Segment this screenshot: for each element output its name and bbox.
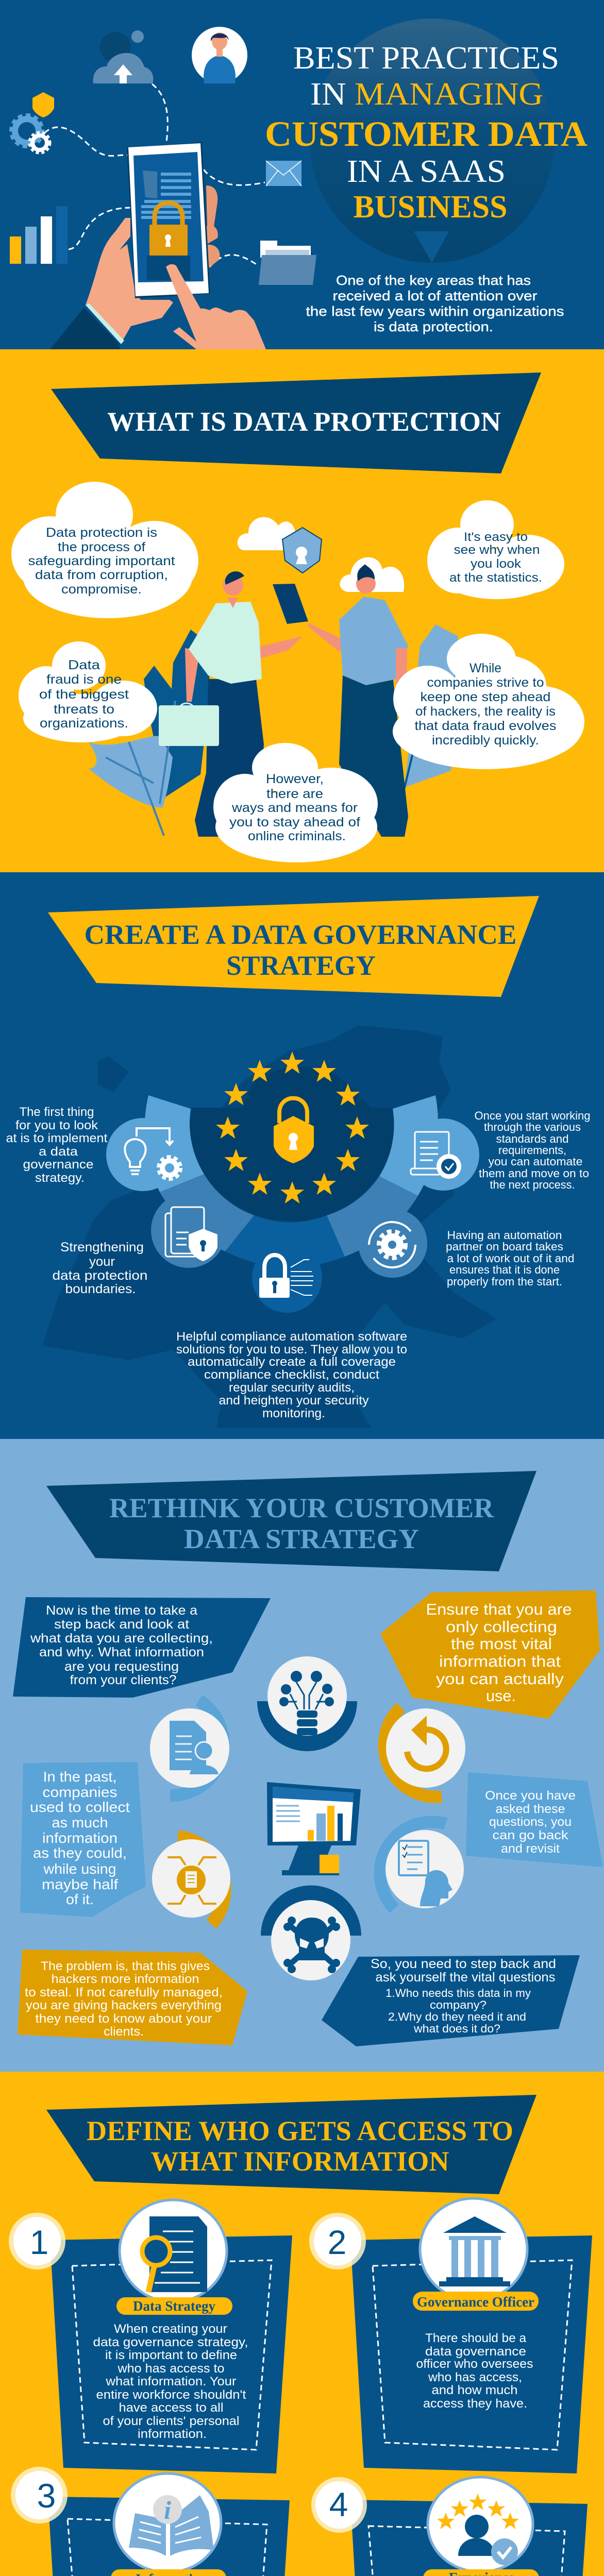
text: boundaries xyxy=(53,1240,147,1296)
callout: vital information: only collecting xyxy=(446,1618,557,1636)
text: first thing: strategy. xyxy=(35,1171,85,1185)
callout: statistics: see why when xyxy=(454,543,540,557)
ring segments xyxy=(106,1095,479,1313)
callout: vital questions xyxy=(322,1955,580,2046)
callout: vital information: the most vital xyxy=(451,1635,552,1653)
text: automate: you can automate xyxy=(489,1155,582,1168)
panel: rethink your customer data strategy xyxy=(0,1439,604,2072)
panel: hero xyxy=(0,0,604,349)
subtitle: One of the key areas that has xyxy=(336,273,531,288)
callout: vital information: use. xyxy=(486,1687,516,1705)
card text: what information. Your xyxy=(105,2375,237,2388)
callout: means xyxy=(213,743,378,862)
icon: document magnifier xyxy=(120,2200,227,2302)
card text: entire workforce shouldn't xyxy=(96,2388,246,2402)
callout: means: there are xyxy=(266,787,323,801)
title: CUSTOMER DATA xyxy=(265,114,588,154)
heading banner: DEFINE WHO GETS ACCESS TO xyxy=(87,2115,513,2146)
heading banner: WHAT INFORMATION xyxy=(150,2146,449,2177)
heading banner xyxy=(48,896,539,997)
callout: hackers: of hackers, the reality is xyxy=(415,704,556,719)
text: automate: Once you start working xyxy=(474,1109,591,1122)
callout: step back xyxy=(13,1597,271,1698)
stars xyxy=(216,1052,369,1204)
text: compliance software: compliance checklist, conduct xyxy=(204,1368,379,1382)
callout: vital information: information that xyxy=(439,1652,561,1670)
callout: in the past xyxy=(20,1762,146,1917)
card 2: governance officer xyxy=(309,2198,592,2473)
callout: in the past: as much xyxy=(52,1815,108,1831)
callout: statistics xyxy=(427,500,564,599)
number 3 xyxy=(11,2467,68,2523)
text: automation partner: partner on board takes xyxy=(446,1240,563,1253)
icon: gears xyxy=(11,115,50,153)
map island xyxy=(98,1056,129,1092)
icon: folder xyxy=(259,241,316,285)
number 4: 4 xyxy=(329,2485,348,2523)
card text: it is important to define xyxy=(105,2348,237,2362)
heading banner: DATA STRATEGY xyxy=(184,1523,419,1554)
illustration: man with briefcase xyxy=(159,571,303,837)
callout: the problem: to steal. If not carefully managed, xyxy=(25,1986,223,1999)
icon: open book xyxy=(114,2473,221,2572)
text: automation partner: properly from the start. xyxy=(447,1275,562,1288)
callout: means: However, xyxy=(266,772,324,786)
illustration: hand holding phone xyxy=(50,142,266,349)
icon: bank building xyxy=(420,2198,527,2300)
icon: data connections xyxy=(152,1837,230,1924)
callout: means: you to stay ahead of xyxy=(229,815,360,829)
callout: vital questions: company? xyxy=(430,1998,486,2011)
callout: hackers: keep one step ahead xyxy=(421,690,550,704)
icon: central lock shield xyxy=(274,1098,314,1163)
text: automation partner xyxy=(446,1229,574,1288)
text: automation partner: a lot of work out of it and xyxy=(447,1252,574,1265)
text: compliance software: regular security audits, xyxy=(229,1381,355,1395)
illustration: small clouds and shield xyxy=(238,517,404,592)
text: first thing: a data xyxy=(39,1145,78,1159)
callout: revisit: asked these xyxy=(496,1802,565,1816)
callout: vital questions: So, you need to step back and xyxy=(371,1957,556,1971)
title: IN MANAGING xyxy=(310,77,543,112)
number 4 xyxy=(311,2477,367,2533)
callout: statistics: at the statistics. xyxy=(449,571,542,585)
callout: the problem: they need to know about your xyxy=(35,2012,212,2026)
text: automation partner: ensures that it is done xyxy=(449,1263,560,1276)
illustration: plants xyxy=(89,624,458,836)
number 2: 2 xyxy=(328,2223,346,2261)
card text: data governance xyxy=(425,2345,526,2359)
card text: officer who oversees xyxy=(416,2357,533,2371)
subtitle: received a lot of attention over xyxy=(333,288,538,303)
callout: the problem xyxy=(18,1950,247,2045)
subtitle xyxy=(306,273,564,334)
callout: vital information: Ensure that you are xyxy=(426,1600,572,1618)
callout: fraud: threats to xyxy=(54,702,114,717)
callout: the problem: The problem is, that this gives xyxy=(41,1959,210,1973)
icon: shield xyxy=(32,92,54,117)
icon: bar chart xyxy=(10,206,68,264)
callout: revisit: Once you have xyxy=(485,1789,576,1803)
icon: envelope xyxy=(266,161,301,186)
text: first thing: The first thing xyxy=(20,1105,94,1119)
subtitle: the last few years within organizations xyxy=(306,303,564,319)
callout: step back: Now is the time to take a xyxy=(46,1603,197,1618)
panel: define who gets access xyxy=(0,2072,604,2576)
label pill xyxy=(423,2569,539,2576)
map of Europe xyxy=(42,1025,497,1428)
callout: vital questions: what does it do? xyxy=(413,2022,500,2035)
text: boundaries: your xyxy=(89,1255,115,1269)
callout: in the past: of it. xyxy=(66,1891,94,1907)
callout: hackers xyxy=(393,634,584,769)
card text: access they have. xyxy=(423,2397,527,2411)
callout: definition: safeguarding important xyxy=(28,554,175,568)
callout: step back: what data you are collecting, xyxy=(30,1631,213,1646)
card text xyxy=(93,2322,248,2441)
callout: in the past: companies xyxy=(42,1784,118,1800)
icon: document with person xyxy=(150,1700,229,1795)
callout: hackers: that data fraud evolves xyxy=(414,719,557,733)
text: first thing: governance xyxy=(23,1158,94,1172)
callout: step back: from your clients? xyxy=(70,1673,176,1687)
text: automate: them and move on to xyxy=(479,1167,589,1180)
callout: definition: data from corruption, xyxy=(35,568,168,582)
icon: gear cycle xyxy=(369,1222,415,1267)
location pin backdrop xyxy=(310,19,554,263)
heading banner xyxy=(46,2095,536,2194)
label pill xyxy=(111,2569,226,2576)
card 1: data strategy xyxy=(9,2200,292,2473)
icon: open book: i xyxy=(164,2496,171,2524)
card 3: information xyxy=(11,2467,290,2576)
central dark disc xyxy=(189,1065,394,1221)
heading banner: STRATEGY xyxy=(226,950,376,981)
card text: and how much xyxy=(432,2383,517,2397)
callout: vital questions: 1.Who needs this data in my xyxy=(385,1987,531,1999)
callout: definition: compromise. xyxy=(61,582,142,597)
label pill xyxy=(116,2297,232,2315)
card text: There should be a xyxy=(425,2331,527,2345)
icon: database people xyxy=(257,1656,357,1751)
number 3: 3 xyxy=(37,2477,56,2515)
text: compliance software: automatically create a full coverage xyxy=(188,1355,396,1369)
heading banner: RETHINK YOUR CUSTOMER xyxy=(109,1493,494,1523)
text: compliance software: Helpful compliance automation software xyxy=(176,1330,407,1344)
callout: definition: the process of xyxy=(58,540,145,554)
text: first thing: for you to look xyxy=(15,1118,98,1132)
callout: revisit: and revisit xyxy=(501,1842,560,1856)
number 1: 1 xyxy=(30,2223,48,2261)
text: automate: the next process. xyxy=(490,1178,575,1191)
icon: skull xyxy=(261,1886,361,1980)
callout: the problem: clients. xyxy=(104,2025,144,2039)
subtitle: is data protection. xyxy=(374,319,493,334)
text: automation partner: Having an automation xyxy=(447,1229,562,1242)
callout: revisit: questions, you xyxy=(489,1815,572,1829)
label pill: Data Strategy xyxy=(133,2298,215,2314)
text: boundaries: Strengthening xyxy=(60,1240,144,1255)
callout: fraud: fraud is one xyxy=(46,672,122,687)
illustration: man with tablet xyxy=(273,564,408,837)
text: automate: requirements, xyxy=(498,1144,566,1157)
number 2 xyxy=(309,2213,366,2269)
callout: in the past: while using xyxy=(43,1861,116,1877)
callout: in the past: information xyxy=(42,1830,118,1846)
text: compliance software: solutions for you to use. They allow you to xyxy=(176,1343,407,1357)
card text: of your clients' personal xyxy=(103,2414,239,2428)
callout: fraud: Data xyxy=(68,658,100,672)
icon: rated customer xyxy=(428,2477,533,2572)
callout: step back: and why. What information xyxy=(39,1645,204,1659)
icon: avatar xyxy=(192,27,247,83)
callout: revisit xyxy=(466,1772,603,1867)
title: BEST PRACTICES xyxy=(293,41,559,76)
callout: fraud: organizations. xyxy=(40,716,128,731)
callout: means: online criminals. xyxy=(248,829,346,843)
heading banner xyxy=(46,1471,536,1571)
icon: cloud upload xyxy=(93,30,153,83)
callout: hackers: companies strive to xyxy=(427,675,544,690)
callout: step back: step back and look at xyxy=(54,1617,189,1632)
callout: vital information: you can actually xyxy=(436,1670,564,1688)
dashed connectors xyxy=(44,84,265,267)
panel: create a data governance strategy xyxy=(0,872,604,1439)
text: boundaries: data protection xyxy=(53,1268,147,1283)
icon: bulb and gear xyxy=(125,1128,181,1179)
text: automate xyxy=(474,1109,591,1191)
title: IN A SAAS xyxy=(347,154,506,189)
text: first thing xyxy=(6,1105,108,1185)
text: compliance software: and heighten your security xyxy=(219,1394,369,1408)
card text: who has access to xyxy=(117,2362,225,2376)
icon: monitor xyxy=(267,1782,361,1875)
callout: vital questions: ask yourself the vital questions xyxy=(375,1970,556,1985)
title: BUSINESS xyxy=(354,190,507,225)
text: automate: standards and xyxy=(496,1132,569,1145)
card text: When creating your xyxy=(114,2322,227,2336)
callout: hackers: incredibly quickly. xyxy=(432,733,539,748)
text: compliance software: monitoring. xyxy=(262,1406,325,1420)
callout: statistics: you look xyxy=(471,557,522,571)
text: first thing: at is to implement xyxy=(6,1131,108,1145)
callout: vital information xyxy=(380,1590,600,1719)
card 4: experience xyxy=(311,2477,588,2576)
card text xyxy=(416,2331,533,2411)
heading banner: CREATE A DATA GOVERNANCE xyxy=(85,919,516,950)
icon: checklist head xyxy=(380,1822,464,1909)
callout: revisit: can go back xyxy=(493,1828,569,1842)
callout: hackers: While xyxy=(469,661,501,675)
card text: who has access, xyxy=(428,2370,522,2384)
text: boundaries: boundaries. xyxy=(65,1282,136,1296)
callout: means: ways and means for xyxy=(231,801,358,815)
callout: definition: Data protection is xyxy=(46,526,157,540)
callout: step back: are you requesting xyxy=(64,1659,179,1674)
icon: documents and shield xyxy=(165,1207,217,1261)
panel: what is data protection xyxy=(0,349,604,872)
icon: revisit arrow xyxy=(384,1707,465,1797)
callout: in the past: as they could, xyxy=(33,1845,127,1861)
callout: in the past: used to collect xyxy=(30,1799,130,1815)
card text: information. xyxy=(138,2427,207,2441)
callout: fraud: of the biggest xyxy=(39,687,129,702)
heading banner xyxy=(51,372,541,473)
callout: fraud xyxy=(19,641,157,742)
number 1 xyxy=(9,2213,65,2269)
card text: have access to all xyxy=(119,2401,224,2415)
heading banner: WHAT IS DATA PROTECTION xyxy=(107,407,501,437)
text: compliance software xyxy=(176,1330,407,1420)
callout: statistics: It's easy to xyxy=(464,530,528,544)
icon: lock with circuits xyxy=(259,1255,313,1298)
callout: definition xyxy=(11,482,198,618)
callout: in the past: maybe half xyxy=(42,1876,118,1892)
callout: the problem: hackers more information xyxy=(52,1972,199,1986)
callout: vital questions: 2.Why do they need it and xyxy=(388,2010,526,2023)
card text: data governance strategy, xyxy=(93,2335,248,2349)
icon: certificate xyxy=(411,1132,461,1179)
callout: in the past: In the past, xyxy=(43,1769,116,1785)
callout: the problem: you are giving hackers everything xyxy=(26,1998,222,2012)
title xyxy=(265,41,588,225)
label pill: Governance Officer xyxy=(417,2294,534,2310)
text: automate: through the various xyxy=(484,1121,581,1133)
